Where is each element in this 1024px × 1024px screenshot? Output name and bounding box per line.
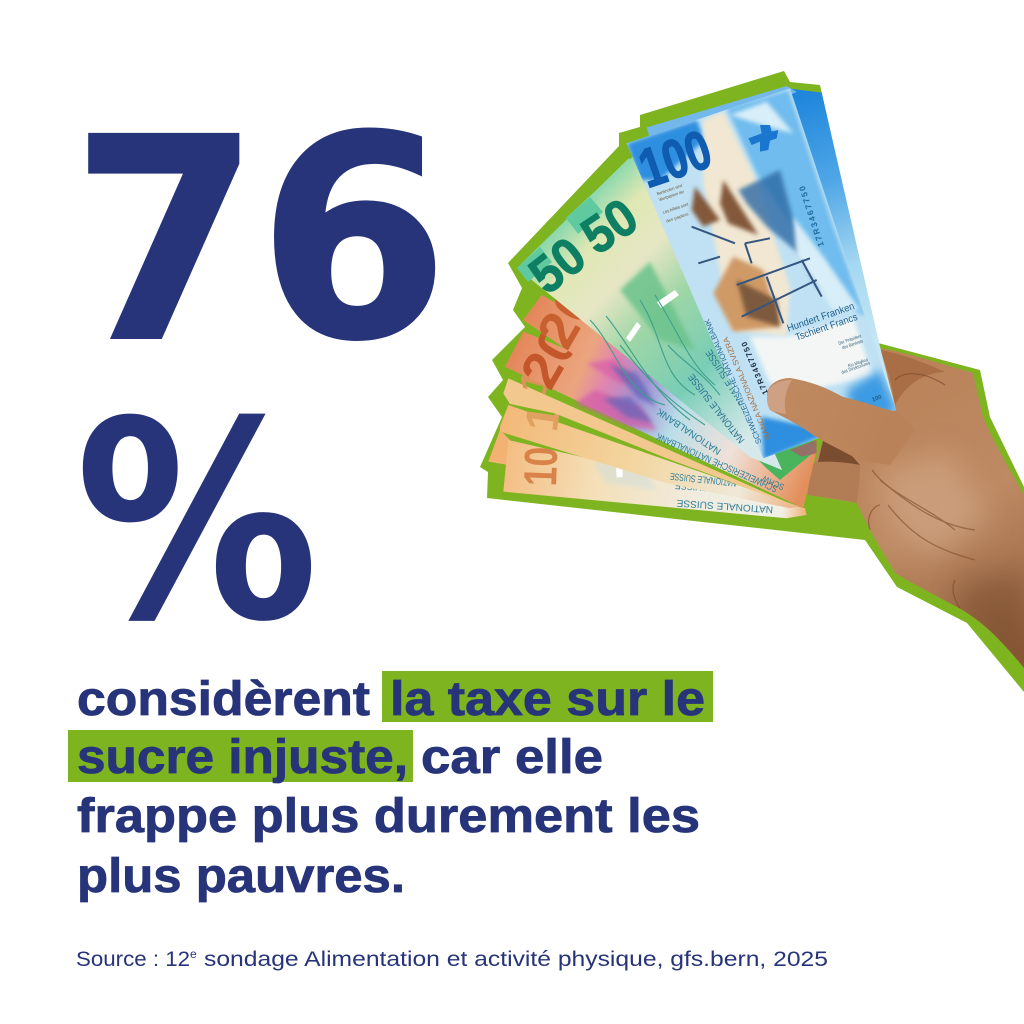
banknote: 100 francs front: Hundert Franken — [786, 301, 856, 334]
big number: 76: 6 — [258, 77, 449, 403]
hand: thumbnail — [767, 380, 792, 414]
banknote: 10 francs front: NATIONALE SUISSE — [674, 479, 760, 496]
banknote: 20 francs front: SCHWEIZERISCHE NATIONALBANK — [654, 430, 780, 494]
banknote: 100 francs front: Ein Mitglied — [847, 357, 869, 369]
banknote: 100 francs front — [627, 88, 898, 460]
banknote: 10 francs front — [503, 440, 807, 518]
banknote: 10 francs third: 1 — [511, 366, 559, 399]
highlight: second line — [68, 730, 413, 782]
banknote: 50 francs rear — [517, 158, 782, 470]
banknote: 100 francs front: BANCA NAZIONALA SVIZRA — [721, 335, 772, 441]
statement text: considèrent — [77, 673, 370, 726]
banknotes: 10 and 20 francs fan: SCHW — [760, 473, 786, 492]
banknote: 10 francs second: NATIONALE SUISSE — [669, 470, 737, 488]
banknote: 100 francs front: 17R3467750 — [740, 340, 770, 396]
banknote: 100 francs front: Les billets sont — [662, 201, 690, 215]
source line — [76, 947, 828, 971]
banknote: 100 francs front: des Bankrats — [841, 338, 864, 350]
banknote: green corner — [757, 438, 817, 480]
source line: sondage Alimentation et activité physique, gfs.bern, 2025 — [204, 948, 828, 971]
banknote: 20 francs front — [505, 317, 817, 508]
banknote: 50 francs rear: NATIONALE SUISSE — [686, 371, 747, 445]
statement text: la taxe sur le — [390, 673, 705, 726]
banknotes: 100 francs — [627, 86, 898, 460]
banknote: 20 francs rear — [523, 277, 817, 457]
banknote: 20 francs rear: NATIONALBANK — [655, 405, 723, 457]
banknote: 20 francs front: 20 — [510, 317, 590, 398]
banknote: 10 francs front: 10 — [514, 446, 567, 487]
banknote: 100 francs front: Wertpapiere der — [658, 189, 685, 202]
banknote: 50 francs front — [566, 150, 782, 470]
statement text: frappe plus durement les — [77, 790, 700, 843]
statement text — [77, 673, 705, 903]
banknote: rear blue strip — [788, 88, 896, 410]
hand: palm and fingers behind notes — [808, 348, 1024, 668]
banknote: 100 francs front: 17R3467750 — [797, 184, 826, 248]
banknote: 10 francs third — [503, 366, 797, 507]
source line: e — [190, 947, 197, 961]
banknote: 50 francs front: NATIONALE SUISSE — [704, 347, 760, 424]
banknote: 100 francs front: SCHWEIZERISCHE NATIONALBANK — [702, 317, 763, 445]
banknote: 100 francs front: 100 — [631, 118, 719, 200]
hand: thumb over notes — [767, 378, 915, 465]
statement text: plus pauvres. — [77, 850, 405, 903]
big number: 76 — [71, 77, 449, 405]
green cut-out outline — [480, 71, 1024, 692]
source line: Source : 12 — [76, 948, 190, 971]
banknote: 100 francs front: 100 — [871, 394, 883, 404]
banknote: 20 francs rear: 20 — [526, 277, 607, 358]
banknote: 100 francs front: Tschient Francs — [794, 312, 859, 343]
statement text: car elle — [421, 731, 603, 784]
banknote: 10 francs second — [500, 401, 800, 508]
banknote: rear 100 francs edge — [647, 86, 797, 150]
banknote: 10 francs second: 1 — [515, 401, 570, 434]
banknote: 50 francs rear: 50 — [519, 227, 597, 305]
banknote: 10 francs rear edge — [488, 430, 510, 465]
banknote: 100 francs front: Banknoten sind — [656, 183, 683, 196]
illustration: hand holding Swiss banknotes — [480, 71, 1024, 692]
banknote: 50 francs front: 50 — [571, 188, 648, 266]
banknote: 10 francs front: NATIONALE SUISSE — [676, 497, 774, 515]
big number: 76: 7 — [71, 79, 260, 405]
hand: shading — [808, 350, 1024, 680]
highlight: first line — [382, 671, 713, 722]
banknote: 100 francs front: des Direktoriums — [841, 360, 871, 375]
banknote: 100 francs front: des papiers — [665, 211, 689, 224]
banknote: 100 francs front: Der Präsident — [838, 333, 863, 346]
statement text: sucre injuste, — [77, 731, 408, 784]
percent sign: % — [75, 363, 319, 683]
banknotes: 10 and 20 francs fan — [488, 277, 817, 518]
